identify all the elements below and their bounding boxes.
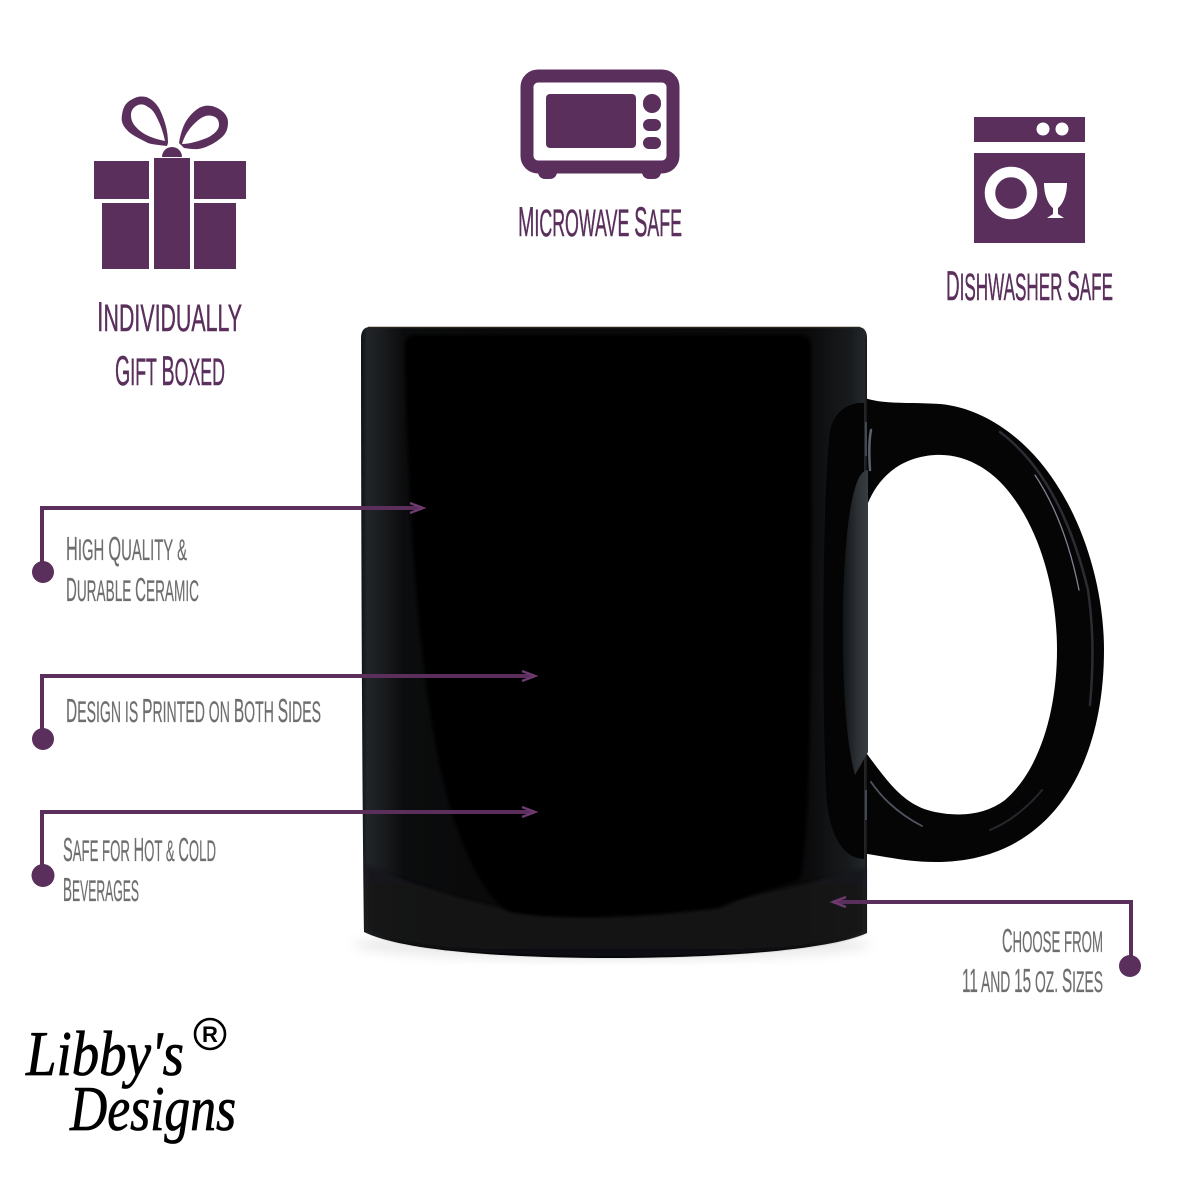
heading: individually gift boxed: GIFT BOXED [115, 347, 225, 394]
logo: Libby's Designs: Designs [69, 1073, 236, 1144]
logo: Libby's Designs [25, 1018, 236, 1144]
label: HIGH QUALITY & [66, 530, 187, 567]
heading: microwave safe: MICROWAVE SAFE [518, 198, 682, 245]
label: DESIGN IS PRINTED ON BOTH SIDES [66, 692, 321, 729]
icon: microwave [527, 76, 673, 179]
dot [32, 561, 54, 583]
connector arrow [833, 897, 1131, 966]
callout: choose from sizes [833, 897, 1141, 999]
dot [32, 728, 54, 750]
mug floor shadow [354, 929, 870, 961]
connector arrow [42, 807, 535, 875]
mug photo: black ceramic mug [354, 327, 1104, 961]
black core reflection [405, 335, 811, 917]
label: SAFE FOR HOT & COLD [63, 831, 216, 868]
callout: safe for hot and cold beverages [32, 807, 535, 908]
connector arrow [42, 503, 423, 572]
handle lug on mug [823, 403, 868, 859]
icon: dishwasher [974, 117, 1085, 243]
label [66, 530, 199, 608]
dot [1119, 955, 1141, 977]
callout: design printed on both sides [32, 671, 535, 750]
callout: high quality and durable ceramic [32, 503, 423, 608]
registered mark [195, 1019, 225, 1049]
label: DURABLE CERAMIC [66, 571, 199, 608]
mug handle [860, 396, 1104, 862]
mug body [361, 327, 867, 958]
label [962, 922, 1103, 999]
handle highlights [869, 430, 1092, 830]
heading: individually gift boxed [97, 293, 242, 394]
dot [32, 864, 54, 887]
bottom reflection band [366, 865, 865, 956]
label: 11 AND 15 OZ. SIZES [962, 962, 1103, 999]
label [63, 831, 216, 908]
label: BEVERAGES [63, 871, 139, 908]
connector arrow [42, 671, 535, 739]
rim line [368, 326, 860, 328]
icon: gift box [94, 96, 246, 269]
logo: Libby's Designs: Libby's [25, 1018, 184, 1089]
heading: individually gift boxed: INDIVIDUALLY [97, 293, 242, 340]
registered mark: R [202, 1022, 218, 1047]
heading: dishwasher safe: DISHWASHER SAFE [946, 262, 1113, 309]
